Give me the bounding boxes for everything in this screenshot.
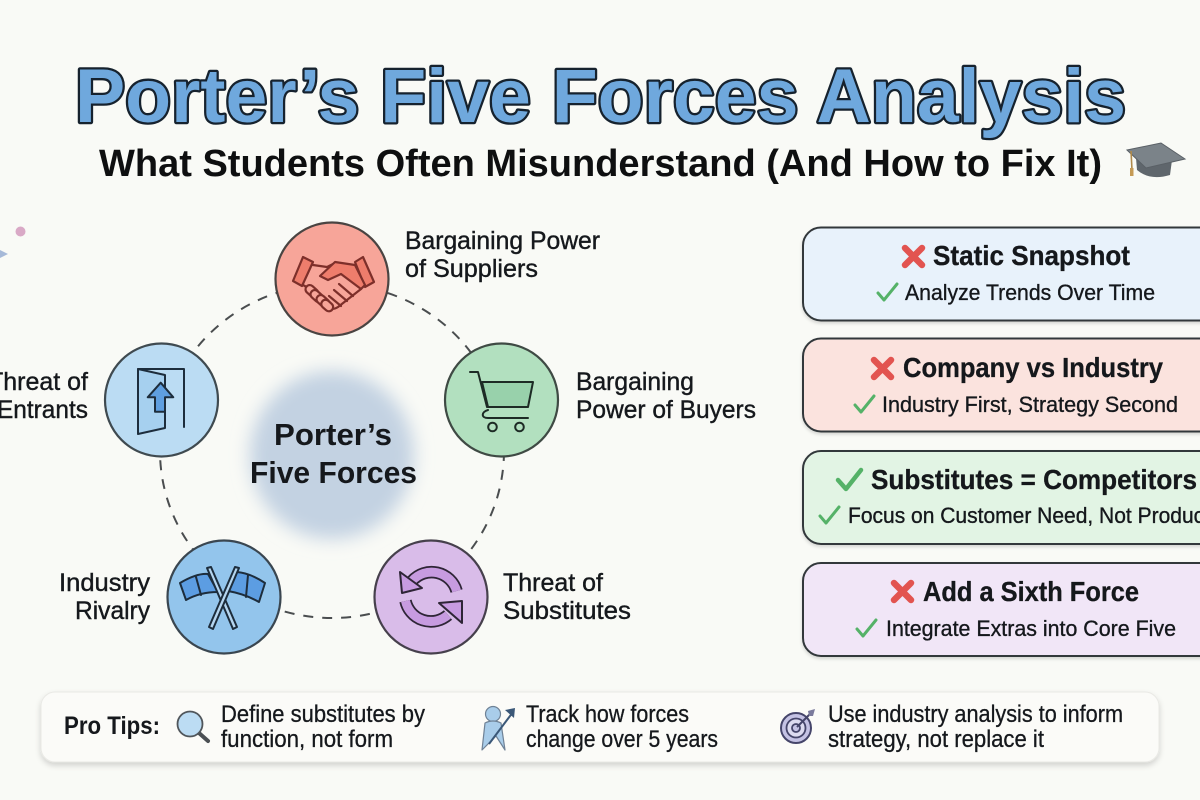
label: threat of substitutes: Threat of [503, 569, 603, 597]
tip: define substitutes: function, not form [221, 726, 393, 753]
icon: handshake [293, 257, 374, 313]
icon: magnifier [178, 712, 208, 741]
center hub: Porter's Five Forces: Five Forces [250, 455, 417, 490]
icon: person with arrow [482, 706, 515, 750]
icon: target with dart [781, 709, 815, 743]
label: threat of new entrants [0, 368, 88, 424]
label: bargaining power of suppliers: of Suppliers [405, 255, 538, 283]
card fix text: Integrate Extras into Core Five [886, 616, 1176, 641]
label: bargaining power of suppliers: Bargaining Power [405, 227, 600, 255]
label: bargaining power of buyers: Power of Buyers [576, 396, 756, 424]
card heading: Static Snapshot [933, 240, 1130, 271]
panel: static snapshot card [803, 228, 1200, 320]
icon: green check [878, 284, 897, 300]
card fix text: Analyze Trends Over Time [905, 280, 1155, 305]
icon: red cross [894, 583, 911, 600]
icon: green check [855, 396, 874, 412]
card heading: Company vs Industry [903, 352, 1163, 383]
panel: company vs industry card [803, 338, 1200, 432]
force: bargaining power of suppliers [276, 222, 388, 336]
icon: shopping cart [470, 372, 533, 431]
center hub: Porter's Five Forces: Porter’s [274, 417, 392, 452]
tip: use industry analysis: Use industry analysis to inform [828, 701, 1123, 728]
tip: track forces [526, 701, 718, 753]
icon: green check [838, 470, 861, 489]
tip: track forces: change over 5 years [526, 726, 718, 753]
icon: graduation cap [1127, 143, 1185, 177]
decoration: blue star tip [0, 250, 8, 258]
force: threat of new entrants [105, 344, 218, 456]
force: threat of substitutes [374, 540, 488, 654]
tip: use industry analysis: strategy, not replace it [828, 726, 1044, 753]
pro tips heading: Pro Tips: [64, 712, 160, 740]
icon: red cross [905, 248, 922, 265]
icon: refresh arrows [400, 572, 462, 623]
label: bargaining power of buyers: Bargaining [576, 368, 694, 396]
icon: green check [820, 507, 839, 523]
label: industry rivalry: Industry [59, 569, 151, 597]
icon: crossed flags [180, 567, 265, 629]
panel: add a sixth force card [803, 563, 1200, 656]
panel: substitutes equal competitors card [803, 451, 1200, 544]
icon: green check [857, 620, 876, 636]
icon: door with arrow [138, 369, 184, 434]
label: threat of substitutes [503, 569, 631, 625]
icon: red cross [874, 360, 891, 377]
tip: use industry analysis [828, 701, 1123, 753]
force: industry rivalry [168, 540, 280, 654]
title: Porter’s Five Forces Analysis [75, 54, 1126, 139]
panel: pro tips [41, 692, 1159, 762]
label: bargaining power of suppliers [405, 227, 600, 283]
label: threat of substitutes: Substitutes [503, 597, 631, 625]
subtitle: What Students Often Misunderstand (And How to Fix It) [99, 143, 1102, 185]
tip: define substitutes [221, 701, 425, 753]
card heading: Add a Sixth Force [923, 576, 1139, 607]
force: bargaining power of buyers [445, 344, 558, 456]
label: bargaining power of buyers [576, 368, 756, 424]
dashed ring connecting forces [160, 284, 504, 618]
tip: define substitutes: Define substitutes by [221, 701, 425, 728]
center hub: Porter's Five Forces [250, 371, 417, 539]
label: industry rivalry: Rivalry [75, 597, 150, 625]
decoration: pink dot [16, 226, 26, 236]
card fix text: Industry First, Strategy Second [882, 392, 1178, 417]
label: industry rivalry [59, 569, 151, 625]
tip: track forces: Track how forces [526, 701, 689, 728]
